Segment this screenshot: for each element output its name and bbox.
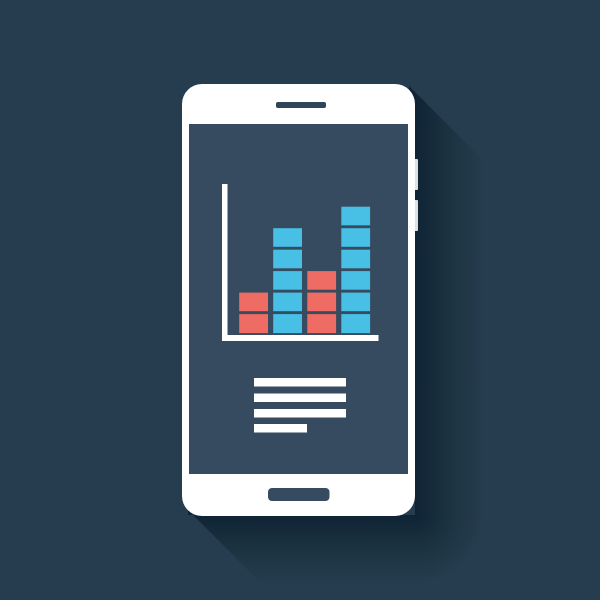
- bar chart: [222, 184, 378, 341]
- red bar 3: [307, 271, 336, 333]
- speaker: [276, 102, 326, 108]
- side buttons: [413, 159, 418, 231]
- blue bar 2: [273, 228, 302, 333]
- red bar 1: [239, 293, 268, 333]
- screen: [189, 124, 408, 474]
- blue bar 4: [341, 207, 370, 333]
- text lines: [254, 378, 346, 432]
- phone body: [182, 84, 415, 516]
- chart axes: [222, 184, 378, 341]
- home button: [268, 488, 330, 501]
- long shadow: [188, 86, 483, 583]
